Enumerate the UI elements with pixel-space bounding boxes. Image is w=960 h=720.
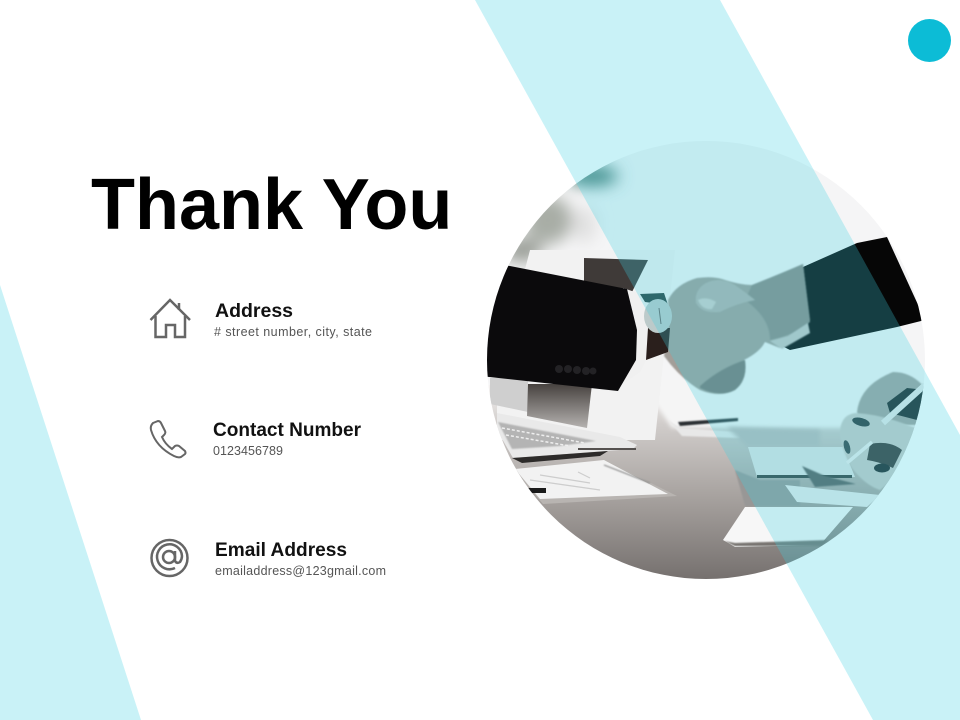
icon: phone: [151, 421, 186, 457]
email value: emailaddress@123gmail.com: [215, 564, 386, 578]
right desk items: [668, 418, 880, 547]
far shirt cuff: [770, 323, 810, 349]
blurred plants in background: [502, 166, 618, 262]
clipboard with paper: [515, 460, 677, 504]
thumbnail: [698, 298, 716, 309]
address details: # street number, city, state: [214, 325, 372, 339]
table surface: [480, 385, 930, 585]
wrist watch: [640, 293, 672, 360]
contact item: phone: [151, 420, 362, 458]
laptop screen: [490, 250, 675, 440]
hand mass: [664, 264, 810, 394]
address heading: Address: [215, 301, 293, 322]
title: Thank You: [91, 165, 452, 245]
contact item: address: [150, 300, 372, 339]
laptop base and keyboard: [497, 413, 637, 463]
icon: house: [150, 300, 190, 337]
diagonal band: lower left: [0, 285, 141, 720]
diagonal band: upper right: [475, 0, 960, 720]
far arm sleeve: [784, 237, 922, 350]
photo: business handshake in circle: [480, 135, 930, 585]
icon: at sign: [152, 540, 188, 576]
writing hand and pen: [840, 372, 925, 490]
thumb: [696, 280, 755, 312]
accent dot: [908, 19, 951, 62]
email heading: Email Address: [215, 540, 347, 561]
near arm suit sleeve: [480, 262, 637, 391]
near shirt cuff: [623, 288, 632, 298]
far hand shading: [745, 264, 810, 340]
contact heading: Contact Number: [213, 420, 362, 441]
lower fingers: [700, 360, 746, 394]
handshake hands: [664, 264, 810, 394]
phone number: 0123456789: [213, 444, 283, 458]
contact item: email: [152, 540, 386, 578]
